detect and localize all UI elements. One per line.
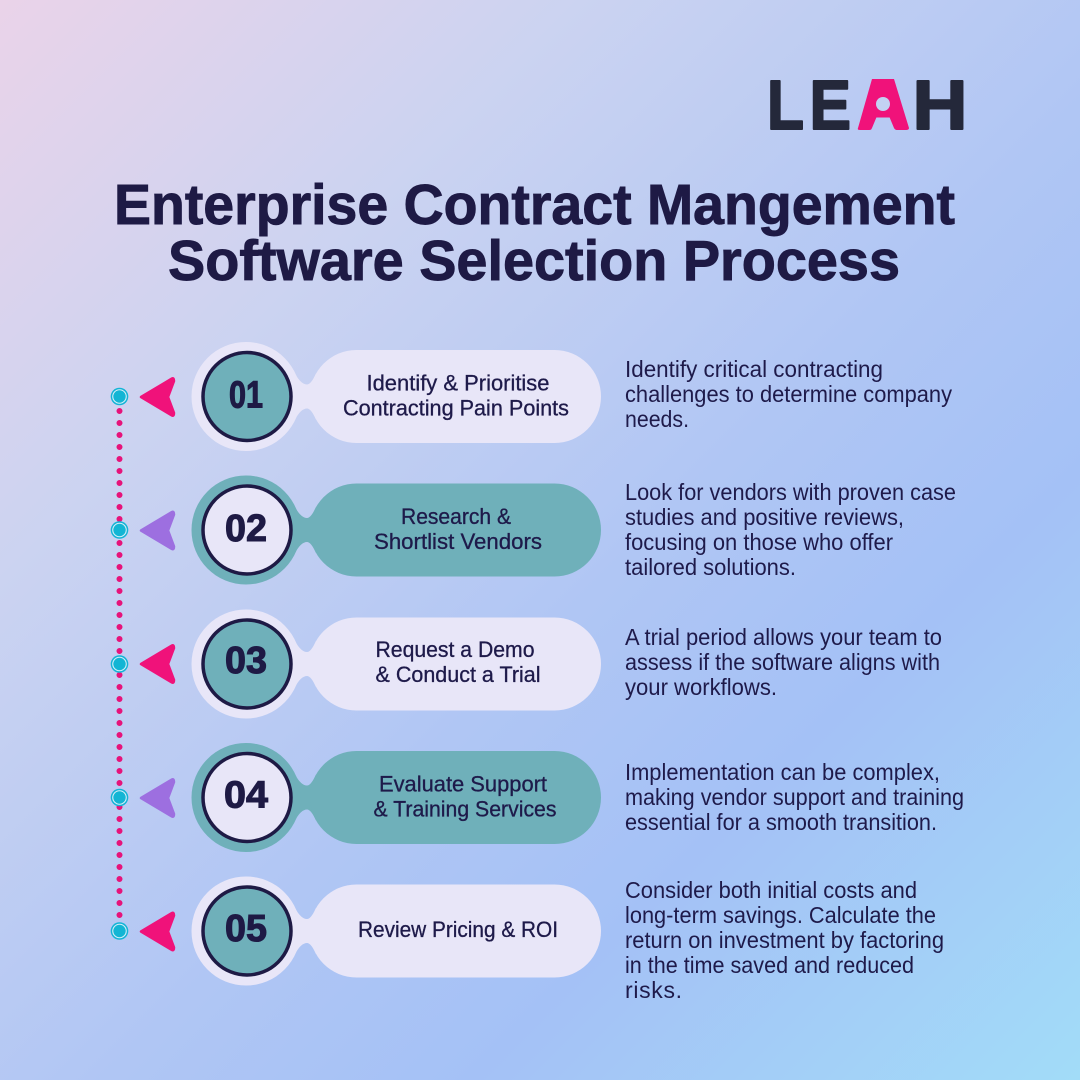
step 1: Contracting Pain Points: [343, 396, 569, 420]
logo: LEAH: E: [810, 66, 851, 144]
step 5 description: in the time saved and reduced: [625, 952, 914, 978]
step 2 description: [625, 479, 956, 580]
step 4 description: making vendor support and training: [625, 784, 964, 810]
title: Software Selection Process: [168, 229, 900, 293]
step 1 description: [625, 356, 952, 432]
timeline node 3: [111, 655, 128, 673]
step 4 description: Implementation can be complex,: [625, 759, 940, 785]
step 1: [192, 342, 601, 451]
step 3: 03: [225, 640, 267, 682]
title: [114, 173, 955, 293]
logo: LEAH: A: [859, 66, 908, 144]
step 5 description: [625, 877, 944, 1003]
arrow 2: [141, 512, 174, 549]
step 2: [192, 476, 601, 584]
arrow 5: [141, 913, 174, 950]
timeline node 2: [111, 521, 128, 539]
logo: LEAH: [767, 66, 968, 144]
step 2: Research &: [401, 504, 511, 529]
title: Enterprise Contract Mangement: [114, 173, 955, 237]
step 5: 05: [225, 908, 267, 950]
timeline node 1: [111, 388, 128, 405]
step 5: [192, 876, 601, 986]
step 5 description: return on investment by factoring: [625, 927, 944, 953]
step 3: & Conduct a Trial: [376, 662, 540, 687]
step 4: & Training Services: [374, 796, 556, 822]
step 2 description: studies and positive reviews,: [625, 504, 904, 530]
step 2 description: Look for vendors with proven case: [625, 479, 956, 505]
step 4: Evaluate Support: [379, 772, 547, 796]
step 2 description: focusing on those who offer: [625, 529, 893, 555]
step 3 description: assess if the software aligns with: [625, 649, 940, 675]
step 1 description: challenges to determine company: [625, 381, 952, 407]
arrow 4: [141, 779, 174, 817]
step 1: 01: [229, 374, 263, 416]
step 4 description: [625, 759, 964, 835]
logo: LEAH: L: [767, 66, 804, 144]
step 3: Request a Demo: [376, 637, 534, 662]
timeline node 5: [111, 922, 128, 940]
step 5: Review Pricing & ROI: [358, 917, 558, 942]
step 5 description: long-term savings. Calculate the: [625, 902, 936, 928]
step 4: 04: [224, 774, 268, 816]
timeline dotted line: [116, 399, 122, 925]
arrow 1: [141, 378, 174, 416]
step 4: [192, 743, 601, 852]
step 2: 02: [225, 508, 267, 550]
step 3 description: [625, 624, 942, 700]
step 1 description: Identify critical contracting: [625, 356, 883, 382]
step 1 description: needs.: [625, 406, 689, 432]
arrow 3: [141, 645, 174, 683]
logo: LEAH: H: [912, 66, 968, 144]
step 3: [192, 610, 601, 718]
step 2: Shortlist Vendors: [374, 529, 542, 554]
step 3 description: your workflows.: [625, 674, 777, 700]
step 3 description: A trial period allows your team to: [625, 624, 942, 650]
step 4 description: essential for a smooth transition.: [625, 809, 937, 835]
step 5 description: risks.: [625, 977, 682, 1003]
timeline node 4: [111, 789, 128, 806]
step 1: Identify & Prioritise: [366, 370, 550, 396]
step 5 description: Consider both initial costs and: [625, 877, 917, 903]
step 2 description: tailored solutions.: [625, 554, 796, 580]
